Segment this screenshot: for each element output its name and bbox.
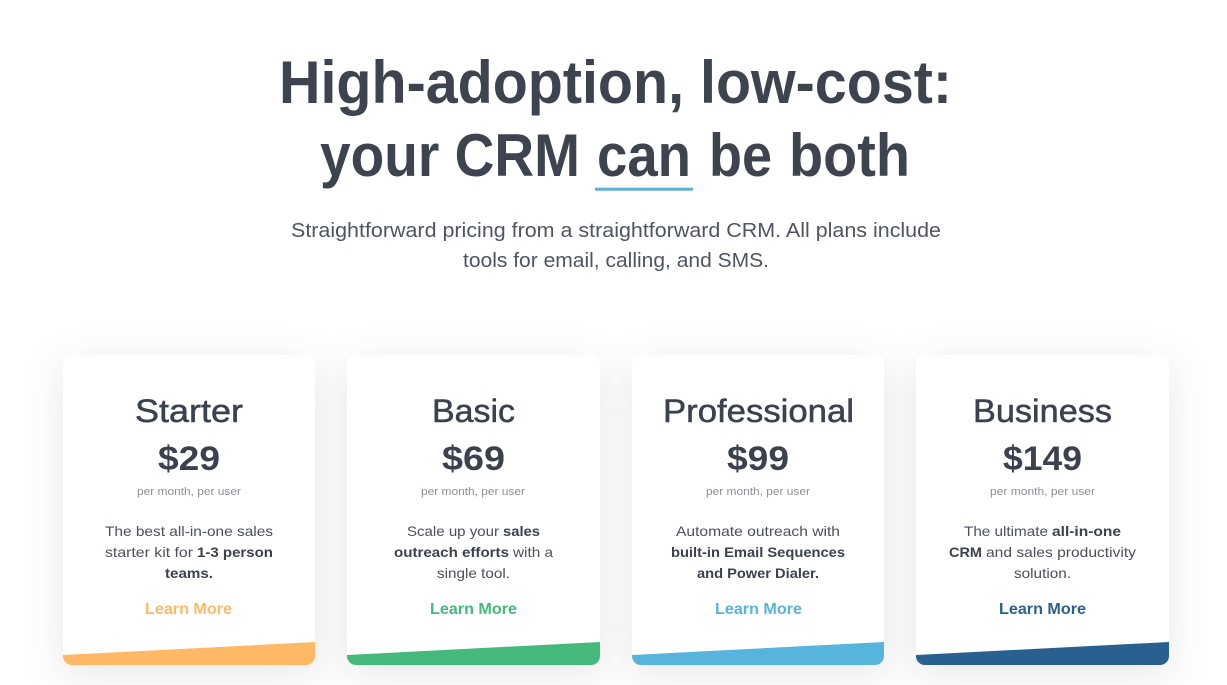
- title: High-adoption, low-cost:: [279, 49, 952, 116]
- description: solution.: [1014, 565, 1071, 581]
- learn more link: Learn More: [430, 601, 517, 618]
- title: your CRM: [320, 122, 580, 189]
- panel: Basic plan: [347, 355, 600, 665]
- accent band: [347, 642, 600, 665]
- accent band: [916, 642, 1169, 665]
- panel: Starter plan: [63, 355, 315, 665]
- title: can: [597, 122, 691, 189]
- learn more link: Learn More: [715, 601, 802, 618]
- plan name: Basic: [432, 393, 515, 429]
- description: outreach efforts: [394, 544, 509, 560]
- description: teams.: [165, 565, 213, 581]
- description: The best all-in-one sales: [105, 523, 273, 539]
- description: [671, 523, 845, 581]
- description: with a: [512, 544, 553, 560]
- price: $29: [158, 440, 220, 478]
- description: [394, 523, 553, 581]
- title: both: [789, 122, 910, 189]
- description: Automate outreach with: [676, 523, 840, 539]
- accent band: [632, 642, 884, 665]
- card background: [632, 355, 884, 665]
- panel: Business plan: [916, 355, 1169, 665]
- description: 1-3 person: [197, 544, 273, 560]
- learn more link: Learn More: [999, 601, 1086, 618]
- price unit: per month, per user: [990, 486, 1095, 498]
- description: and Power Dialer.: [697, 565, 819, 581]
- title: [279, 49, 952, 189]
- learn more link: Learn More: [145, 601, 232, 618]
- description: CRM: [949, 544, 982, 560]
- price: $99: [727, 440, 789, 478]
- description: single tool.: [437, 565, 510, 581]
- price unit: per month, per user: [137, 486, 241, 498]
- subtitle: Straightforward pricing from a straightforward CRM. All plans include: [291, 220, 941, 242]
- description: [949, 523, 1136, 581]
- plan name: Business: [973, 393, 1112, 429]
- price unit: per month, per user: [706, 486, 810, 498]
- description: [105, 523, 273, 581]
- description: Scale up your: [407, 523, 499, 539]
- price unit: per month, per user: [421, 486, 525, 498]
- panel: Professional plan: [632, 355, 884, 665]
- plan name: Starter: [135, 393, 243, 429]
- card background: [916, 355, 1169, 665]
- subtitle: tools for email, calling, and SMS.: [463, 250, 769, 272]
- plan name: Professional: [663, 393, 854, 429]
- subtitle: [291, 220, 941, 272]
- price: $69: [442, 440, 505, 478]
- price: $149: [1003, 440, 1082, 478]
- description: sales: [503, 523, 540, 539]
- description: all-in-one: [1052, 523, 1121, 539]
- description: The ultimate: [964, 523, 1048, 539]
- description: built-in Email Sequences: [671, 544, 845, 560]
- title: be: [709, 122, 772, 189]
- description: starter kit for: [105, 544, 193, 560]
- title underline: [595, 188, 693, 191]
- card background: [347, 355, 600, 665]
- card background: [63, 355, 315, 665]
- description: and sales productivity: [986, 544, 1136, 560]
- accent band: [63, 642, 315, 665]
